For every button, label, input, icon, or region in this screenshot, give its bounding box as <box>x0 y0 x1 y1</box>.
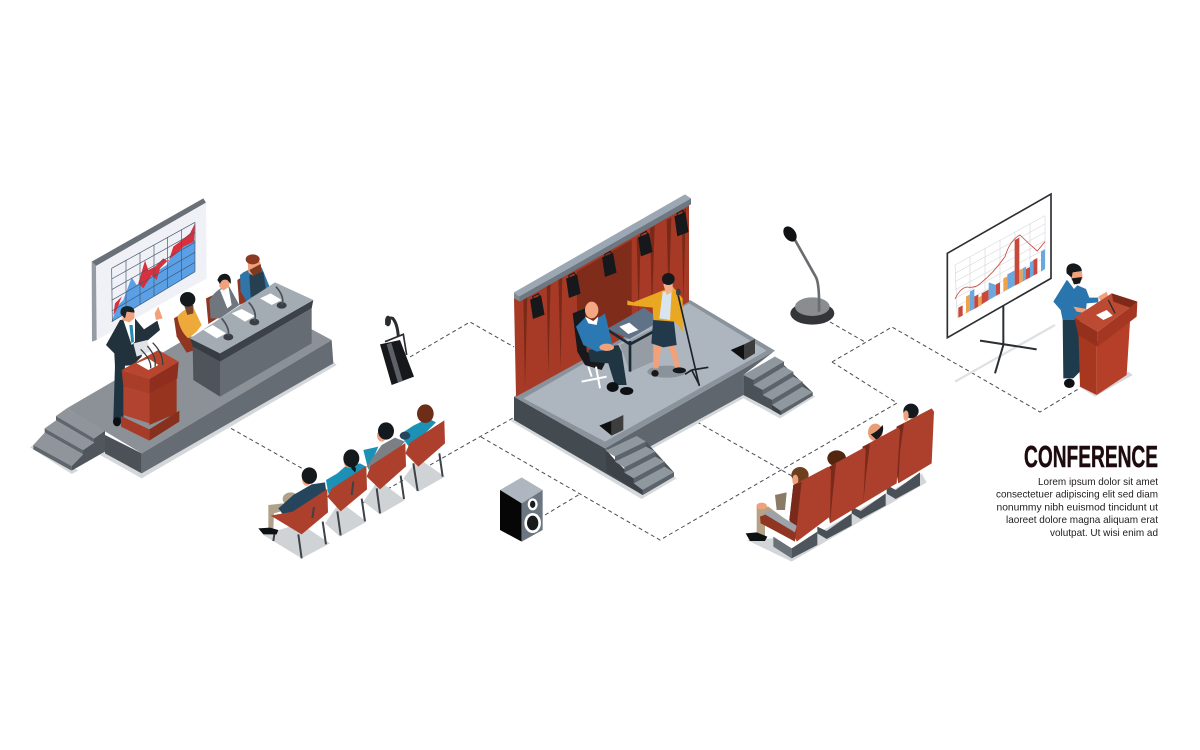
standing microphone icon <box>781 224 834 325</box>
panelist: woman in yellow <box>174 292 202 353</box>
chair four with seated person <box>400 404 445 491</box>
table microphones <box>222 287 287 340</box>
curtain <box>514 205 689 397</box>
audience row on theatre seats <box>746 404 934 562</box>
floor spotlight icon <box>380 316 414 385</box>
chair one with seated person <box>258 467 328 558</box>
front steps <box>606 436 674 495</box>
flip chart board <box>947 194 1051 373</box>
stage header bar <box>514 194 691 302</box>
floor shadow <box>955 325 1055 382</box>
microphone stand <box>676 289 708 386</box>
body text: nonummy nibh euismod tincidunt ut <box>996 501 1158 513</box>
chair shadows <box>263 458 445 558</box>
chair three with seated person <box>352 422 406 513</box>
body text: volutpat. Ut wisi enim ad <box>1050 527 1158 539</box>
body text <box>996 476 1158 539</box>
standing woman <box>627 273 686 378</box>
platform <box>30 328 337 478</box>
steps <box>33 408 105 471</box>
side steps <box>743 357 813 415</box>
loudspeaker icon <box>500 477 543 542</box>
presentation screen <box>92 198 207 342</box>
left scene: panel on raised platform <box>30 198 337 478</box>
right scene: presenter with flip chart <box>947 194 1137 397</box>
seated person legs <box>746 492 787 541</box>
heads above seats <box>791 404 919 485</box>
chair two with seated person <box>312 449 367 535</box>
side table <box>607 308 655 372</box>
panelist: man in grey <box>206 274 239 324</box>
lectern <box>121 343 179 441</box>
stage base <box>511 300 815 499</box>
panelist: bearded man in blue <box>237 254 271 305</box>
seat backs <box>760 408 934 542</box>
seat bases <box>773 472 920 558</box>
speaker at lectern <box>106 306 163 426</box>
dashed connector lines <box>225 322 1080 540</box>
body text: consectetuer adipiscing elit sed diam <box>996 489 1158 501</box>
floor monitors <box>599 339 755 436</box>
stage lights <box>531 210 688 318</box>
presenter <box>1053 263 1108 388</box>
lectern <box>1074 293 1137 397</box>
panel table <box>190 282 313 397</box>
body text: laoreet dolore magna aliquam erat <box>1006 514 1158 526</box>
audience row on chairs <box>258 404 445 558</box>
centre scene: stage <box>511 194 815 499</box>
seat shadow <box>747 473 927 562</box>
body text: Lorem ipsum dolor sit amet <box>1038 476 1158 488</box>
seated man <box>573 302 633 395</box>
